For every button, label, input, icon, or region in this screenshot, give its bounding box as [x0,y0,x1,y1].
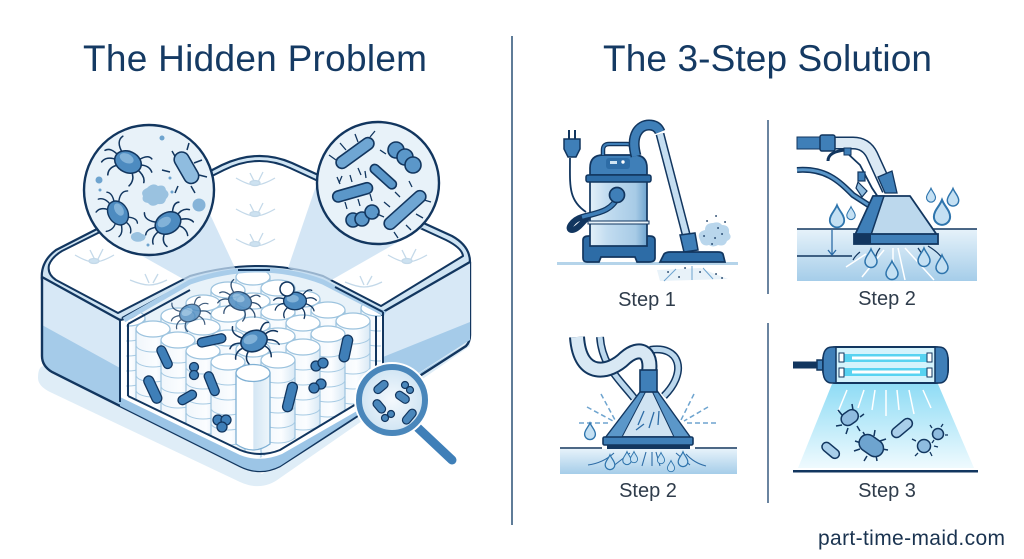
step panel: steam extraction top [797,135,977,310]
floor dust lines [657,266,728,281]
callout circle: bacteria [317,122,439,244]
light rays [838,390,931,416]
title: The 3-Step Solution: The 3-Step Solution [603,38,932,79]
water droplets [585,423,688,472]
mattress bottom band [120,344,466,471]
bacteria under the light [820,404,948,461]
callout circle: dust mites [84,125,214,255]
mites on springs [165,277,316,369]
water jets [846,246,942,280]
main vertical divider [511,36,513,525]
icon: hoses [577,337,678,398]
coccus cluster, bottom [346,205,379,227]
icon: extractor head [603,370,693,449]
mattress ground shadow [38,340,470,486]
label: Step 1: Step 1 [618,289,676,311]
callout beam: left lens [135,210,236,284]
lid band [586,175,651,182]
quilting tufts [75,172,427,287]
dust cloud [699,216,731,246]
label: Step 2: Step 2 [858,288,916,310]
handle [603,144,633,155]
plain rod [368,163,398,191]
floor head [680,233,698,252]
mattress right side [383,262,470,396]
mattress top surface [49,161,463,313]
illustration: mattress cutaway [38,156,470,486]
wheels base [583,236,655,262]
icon: UV lamp [793,347,948,383]
mattress top band [42,156,470,320]
label: Step 3: Step 3 [858,480,916,502]
callout beam: right lens [288,180,426,282]
divider: upper steps [767,120,769,294]
title: The Hidden Problem: The Hidden Problem [83,38,427,79]
icon: carpet floor [560,448,737,474]
icon: pipes and hoses [797,135,897,206]
bacteria in lens [371,379,418,426]
step panel: UV light [793,347,978,502]
icon: UV beam [798,384,974,468]
cutaway interior with pocket springs [126,272,381,458]
icon: vacuum cleaner [557,125,738,281]
plug [569,130,575,139]
ground line [793,470,978,472]
bacterium in circle [162,143,207,193]
floor jets [588,452,706,467]
power cord [570,158,586,212]
mite group [90,132,200,254]
spray dashes [579,394,716,423]
bacteria on springs [142,333,354,432]
upper hose arc [634,125,660,156]
ground line [557,262,738,265]
icon: extractor head [854,196,938,244]
step panel: steam extraction bottom [560,337,737,502]
cutaway frame [120,270,385,454]
rod bacterium with cilia, top [329,131,386,183]
mattress left side [42,262,470,471]
rod bacterium with cilia, left [331,171,374,209]
divider: lower steps [767,323,769,503]
rod bacterium with cilia, right [377,181,431,238]
magnifying glass [354,362,452,460]
dust specks [96,136,206,246]
front spring [236,364,270,450]
lid [590,155,647,175]
step panel: vacuum [557,125,738,311]
water droplets [830,188,959,280]
watermark: part-time-maid.com: part-time-maid.com [818,527,1005,550]
label: Step 2: Step 2 [619,480,677,502]
icon: floor layers [797,229,977,281]
wand [660,134,686,234]
coccus cluster, top [388,142,421,173]
hose on tank [570,196,618,230]
tank [590,178,647,246]
